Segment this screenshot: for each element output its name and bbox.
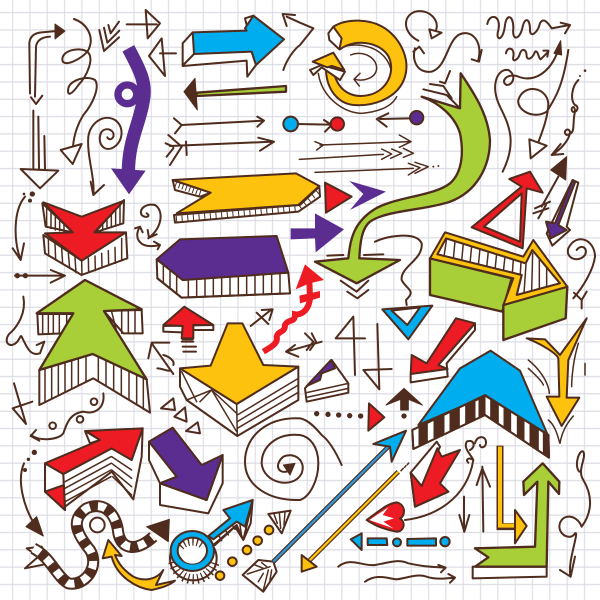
red triangle [325,183,352,213]
bottom-right group of doodles [273,306,590,583]
small crossed arrow [251,309,273,326]
long curve arrow with loop [495,41,562,172]
feathered up-left arrow [148,343,174,374]
squiggle with circles [31,393,104,441]
feathered arrows [166,117,274,165]
crossed down arrow [363,324,392,389]
top-right group of doodles [291,11,595,308]
yellow star arrow box [180,323,298,436]
spiral arrow right [568,239,595,308]
red 3D arrow [45,428,143,510]
up and down thin arrows [459,467,490,532]
crossed triangle arrow [13,383,32,424]
left squiggle arrow [7,297,44,354]
large spiral [245,418,342,500]
looped squiggle arrow [61,19,97,164]
dotted line with red triangle [314,403,384,431]
chevrons [99,22,119,51]
long blue arrow [273,431,406,562]
red triangle arrow outline [472,172,543,248]
feathered tail of the blue arrow [243,560,277,592]
big green up arrow with hatched base [37,280,150,413]
yellow L arrow [500,446,527,543]
green bar arrow [184,78,286,110]
feathered brown arrow [533,157,567,218]
S-curve double arrow [413,33,482,72]
purple wedge [305,360,348,402]
top-left group of doodles [13,10,344,298]
red squiggle arrow [263,264,324,352]
yellow crescent arrow [103,540,175,590]
triple line down arrow [21,111,58,188]
dotted curl arrow [552,69,586,155]
blue dot arrow to red dot [283,117,344,132]
dot-tailed arrow [15,270,65,283]
purple chevron [349,181,386,210]
big green swoosh arrow [315,71,490,298]
blue dashed arrow [351,533,450,550]
red 3D down-left arrow [411,318,475,382]
purple block arrow [157,236,290,298]
triangle arrow left [149,38,176,76]
loop arrow with triangle head [518,50,568,158]
small feathered arrow left [286,333,322,357]
blue ring arrow with hatched cylinder [170,500,291,592]
tail dots [432,165,439,168]
purple block arrow small [291,213,344,252]
yellow ring arrow [310,21,406,113]
purple 3D arrow [149,428,223,513]
number four arrow [336,317,365,375]
purple bar arrow [546,180,578,246]
purple loop arrow [111,48,146,194]
bent double arrow [29,24,65,104]
red diagonal arrow with white edge [411,442,460,507]
top loop arrow [406,11,442,41]
small curl arrows [135,205,161,249]
squiggle line [375,236,422,305]
dotted arc arrow [13,191,35,260]
right loop arrow [559,451,590,577]
green L arrow [473,463,559,578]
blue roof arrow with stripes [412,351,549,458]
wavy arrows [338,561,455,583]
hatched triangle [268,511,291,533]
long yellow arrow [302,463,409,572]
checkered snake arrow [25,506,169,584]
spring arrow small [506,49,548,60]
purple dot arrow [377,111,423,127]
triangle arrow right [127,10,160,38]
dotted curved arrow [21,450,43,536]
top outlined arrow [283,14,313,70]
red double chevron with hatched sides [42,200,127,275]
yellow ribbon arrow [173,173,320,223]
spring arrow large [487,17,570,38]
heart arrow with curled line [367,437,486,532]
blue V triangle [382,306,432,339]
spiral arrow [88,118,122,195]
small red up arrow [163,307,213,352]
bottom-left group of doodles [7,280,342,590]
yellow dots [216,526,273,580]
blue 3D arrow [183,16,284,77]
fine arrows fan [299,135,428,175]
small outlined triangles [161,398,200,433]
yellow tulip arrow [527,318,587,443]
hatched zigzag box arrow [430,232,567,340]
brown up arrow with dot [386,388,422,419]
